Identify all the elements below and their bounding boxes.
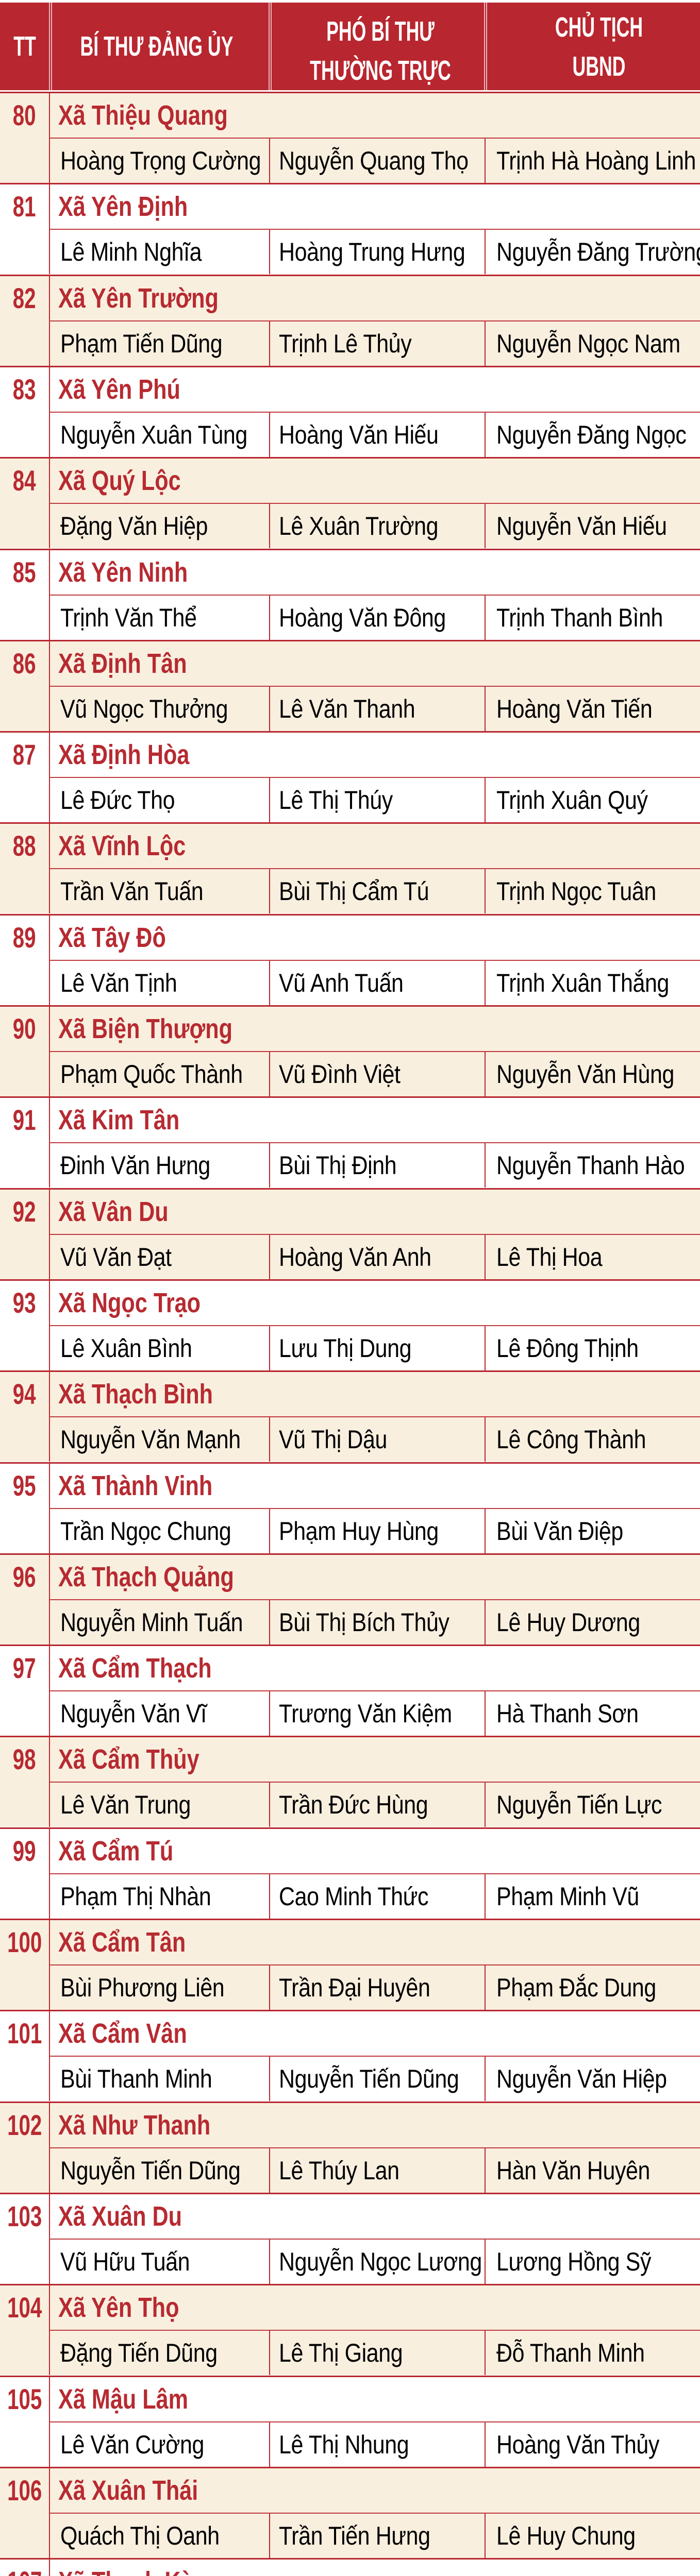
deputy: Lê Thị Giang — [279, 2338, 403, 2367]
number: 100 — [7, 1926, 42, 1958]
deputy: Trần Đức Hùng — [279, 1790, 428, 1819]
number: 97 — [13, 1652, 36, 1684]
number: 102 — [7, 2109, 42, 2141]
secretary: Lê Văn Trung — [60, 1790, 191, 1819]
secretary: Nguyễn Xuân Tùng — [60, 420, 247, 449]
chairman: Lê Thị Hoa — [496, 1243, 602, 1272]
header: deputy secretary — [310, 16, 451, 86]
chairman: Nguyễn Đăng Ngọc — [496, 420, 686, 449]
deputy: Nguyễn Quang Thọ — [279, 146, 469, 175]
deputy: Cao Minh Thức — [279, 1882, 428, 1911]
number: 91 — [13, 1104, 36, 1136]
entry 104 — [0, 2284, 700, 2375]
deputy: Lưu Thị Dung — [279, 1334, 411, 1363]
entry 81 — [0, 183, 700, 274]
deputy: Phạm Huy Hùng — [279, 1517, 439, 1546]
entry 107 — [0, 2558, 700, 2576]
commune name: Xã Định Tân — [58, 648, 187, 679]
header: party secretary: BÍ THƯ ĐẢNG ỦY — [80, 31, 233, 62]
commune name: Xã Như Thanh — [58, 2110, 210, 2141]
deputy: Nguyễn Ngọc Lương — [279, 2247, 482, 2276]
chairman: Nguyễn Thanh Hào — [496, 1151, 685, 1180]
entry 97 — [0, 1645, 700, 1736]
chairman: Hàn Văn Huyên — [496, 2156, 650, 2185]
header: deputy secretary: THƯỜNG TRỰC — [310, 55, 451, 86]
secretary: Vũ Hữu Tuấn — [60, 2247, 190, 2276]
header: chairman: UBND — [573, 51, 625, 82]
commune name: Xã Yên Thọ — [58, 2292, 179, 2323]
entry 96 — [0, 1553, 700, 1645]
chairman: Bùi Văn Điệp — [496, 1517, 623, 1546]
deputy: Trần Đại Huyên — [279, 1973, 430, 2002]
entry 93 — [0, 1279, 700, 1370]
number: 86 — [13, 647, 36, 680]
chairman: Trịnh Hà Hoàng Linh — [496, 146, 696, 175]
secretary: Lê Văn Tịnh — [60, 969, 177, 997]
commune name: Xã Tây Đô — [58, 922, 166, 953]
deputy: Hoàng Văn Hiếu — [279, 420, 439, 449]
secretary: Trần Ngọc Chung — [60, 1517, 231, 1546]
chairman: Trịnh Thanh Bình — [496, 603, 663, 632]
number: 101 — [7, 2017, 42, 2049]
chairman: Hà Thanh Sơn — [496, 1699, 639, 1728]
commune name: Xã Vân Du — [58, 1196, 169, 1227]
number: 81 — [13, 190, 36, 223]
deputy: Hoàng Văn Anh — [279, 1243, 431, 1272]
deputy: Lê Thúy Lan — [279, 2156, 399, 2185]
deputy: Lê Xuân Trường — [279, 512, 438, 540]
chairman: Lê Huy Dương — [496, 1608, 640, 1637]
commune name: Xã Thiệu Quang — [58, 100, 228, 131]
number: 106 — [7, 2474, 42, 2506]
commune name: Xã Yên Trường — [58, 283, 219, 314]
secretary: Lê Xuân Bình — [60, 1334, 192, 1363]
number: 88 — [13, 829, 36, 862]
secretary: Nguyễn Tiến Dũng — [60, 2156, 240, 2185]
secretary: Phạm Quốc Thành — [60, 1060, 243, 1089]
entry 103 — [0, 2193, 700, 2284]
number: 89 — [13, 921, 36, 954]
commune name: Xã Định Hòa — [58, 739, 189, 770]
chairman: Lê Đông Thịnh — [496, 1334, 639, 1363]
number: 104 — [7, 2291, 42, 2324]
entry 82 — [0, 275, 700, 366]
entry 105 — [0, 2376, 700, 2467]
chairman: Lê Huy Chung — [496, 2521, 636, 2550]
secretary: Lê Đức Thọ — [60, 786, 175, 815]
number: 85 — [13, 556, 36, 588]
chairman: Hoàng Văn Tiến — [496, 694, 652, 723]
entry 101 — [0, 2010, 700, 2101]
deputy: Hoàng Văn Đông — [279, 603, 446, 632]
number: 84 — [13, 464, 36, 497]
number: 92 — [13, 1195, 36, 1228]
number: 87 — [13, 738, 36, 771]
chairman: Trịnh Ngọc Tuân — [496, 877, 656, 906]
commune name: Xã Cẩm Thạch — [58, 1653, 212, 1684]
chairman: Nguyễn Ngọc Nam — [496, 329, 680, 358]
commune name: Xã Thạch Bình — [58, 1379, 213, 1410]
commune name: Xã Thạch Quảng — [58, 1562, 234, 1592]
entry 94 — [0, 1370, 700, 1462]
commune name: Xã Biện Thượng — [58, 1013, 232, 1044]
number: 96 — [13, 1561, 36, 1593]
secretary: Đinh Văn Hưng — [60, 1151, 210, 1180]
secretary: Quách Thị Oanh — [60, 2521, 220, 2550]
secretary: Bùi Thanh Minh — [60, 2064, 212, 2093]
commune name: Xã Cẩm Thủy — [58, 1744, 199, 1775]
number: 103 — [7, 2200, 42, 2232]
secretary: Hoàng Trọng Cường — [60, 146, 261, 175]
secretary: Trần Văn Tuấn — [60, 877, 203, 906]
entry 91 — [0, 1096, 700, 1188]
chairman: Phạm Minh Vũ — [496, 1882, 639, 1911]
commune name: Xã Quý Lộc — [58, 465, 181, 496]
secretary: Lê Văn Cường — [60, 2430, 204, 2459]
secretary: Bùi Phương Liên — [60, 1973, 224, 2002]
chairman: Trịnh Xuân Thắng — [496, 969, 669, 997]
commune name: Xã Yên Ninh — [58, 557, 188, 588]
number: 93 — [13, 1286, 36, 1319]
secretary: Nguyễn Văn Vĩ — [60, 1699, 207, 1728]
number: 94 — [13, 1378, 36, 1410]
entry 106 — [0, 2467, 700, 2558]
deputy: Lê Văn Thanh — [279, 694, 415, 723]
entry 87 — [0, 731, 700, 822]
deputy: Vũ Đình Việt — [279, 1060, 400, 1089]
entry 88 — [0, 822, 700, 913]
chairman: Lương Hồng Sỹ — [496, 2247, 651, 2276]
commune name: Xã Xuân Thái — [58, 2475, 198, 2506]
deputy: Lê Thị Thúy — [279, 786, 393, 815]
number: 80 — [13, 99, 36, 131]
chairman: Nguyễn Văn Hiệp — [496, 2064, 667, 2093]
entry 100 — [0, 1919, 700, 2010]
commune name: Xã Ngọc Trạo — [58, 1287, 201, 1318]
number: 95 — [13, 1469, 36, 1502]
deputy: Trần Tiến Hưng — [279, 2521, 430, 2550]
commune name: Xã Mậu Lâm — [58, 2384, 188, 2415]
deputy: Bùi Thị Bích Thủy — [279, 1608, 449, 1637]
entry 80 — [0, 92, 700, 183]
secretary: Vũ Văn Đạt — [60, 1243, 172, 1272]
secretary: Trịnh Văn Thể — [60, 603, 197, 632]
secretary: Nguyễn Văn Mạnh — [60, 1425, 241, 1454]
commune name: Xã Cẩm Tú — [58, 1836, 173, 1867]
number: 82 — [13, 282, 36, 314]
commune name: Xã Yên Định — [58, 191, 188, 222]
number: 105 — [7, 2383, 42, 2415]
entry 90 — [0, 1005, 700, 1096]
entry 95 — [0, 1462, 700, 1553]
number: 90 — [13, 1012, 36, 1045]
secretary: Đặng Văn Hiệp — [60, 512, 208, 540]
header: chairman — [555, 11, 643, 82]
deputy: Nguyễn Tiến Dũng — [279, 2064, 459, 2093]
header: TT: TT — [13, 31, 36, 62]
secretary: Lê Minh Nghĩa — [60, 238, 202, 266]
chairman: Lê Công Thành — [496, 1425, 646, 1454]
secretary: Đặng Tiến Dũng — [60, 2338, 218, 2367]
deputy: Trịnh Lê Thủy — [279, 329, 411, 358]
deputy: Bùi Thị Định — [279, 1151, 396, 1180]
deputy: Vũ Anh Tuấn — [279, 969, 404, 997]
deputy: Bùi Thị Cẩm Tú — [279, 877, 429, 906]
header: deputy secretary: PHÓ BÍ THƯ — [326, 16, 435, 47]
chairman: Phạm Đắc Dung — [496, 1973, 656, 2002]
entry 83 — [0, 366, 700, 457]
header: chairman: CHỦ TỊCH — [555, 12, 643, 43]
secretary: Vũ Ngọc Thưởng — [60, 694, 228, 723]
entry 102 — [0, 2102, 700, 2193]
commune name: Xã Kim Tân — [58, 1105, 179, 1136]
deputy: Vũ Thị Dậu — [279, 1425, 387, 1454]
entry 89 — [0, 914, 700, 1005]
deputy: Lê Thị Nhung — [279, 2430, 409, 2459]
commune name: Xã Cẩm Tân — [58, 1927, 186, 1958]
chairman: Hoàng Văn Thủy — [496, 2430, 659, 2459]
number: 83 — [13, 373, 36, 405]
number: 98 — [13, 1743, 36, 1775]
entry 86 — [0, 640, 700, 731]
entry 98 — [0, 1736, 700, 1827]
chairman: Nguyễn Tiến Lực — [496, 1790, 662, 1819]
deputy: Hoàng Trung Hưng — [279, 238, 465, 266]
chairman: Trịnh Xuân Quý — [496, 786, 648, 815]
secretary: Nguyễn Minh Tuấn — [60, 1608, 243, 1637]
table header — [0, 3, 700, 90]
commune name: Xã Cẩm Vân — [58, 2018, 187, 2049]
entry 85 — [0, 549, 700, 640]
commune name: Xã Thành Vinh — [58, 1470, 212, 1501]
entry 84 — [0, 457, 700, 548]
commune name: Xã Vĩnh Lộc — [58, 831, 186, 861]
deputy: Trương Văn Kiệm — [279, 1699, 452, 1728]
chairman: Nguyễn Văn Hiếu — [496, 512, 667, 540]
chairman: Nguyễn Văn Hùng — [496, 1060, 674, 1089]
number: 99 — [13, 1835, 36, 1867]
entry 92 — [0, 1188, 700, 1279]
chairman: Đỗ Thanh Minh — [496, 2338, 645, 2367]
secretary: Phạm Tiến Dũng — [60, 329, 222, 358]
commune name: Xã Xuân Du — [58, 2201, 182, 2232]
entry 99 — [0, 1827, 700, 1919]
secretary: Phạm Thị Nhàn — [60, 1882, 211, 1911]
commune name: Xã Yên Phú — [58, 374, 180, 405]
